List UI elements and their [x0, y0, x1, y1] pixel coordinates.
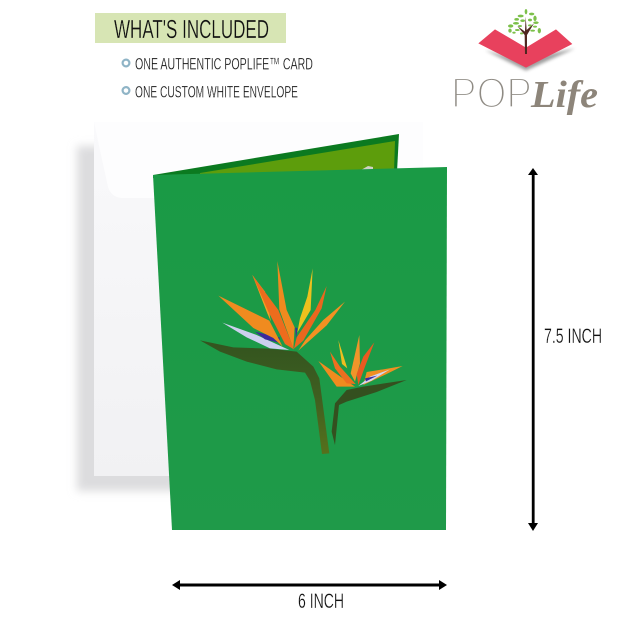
large flower pale petal — [222, 323, 289, 350]
heading: what's included: WHAT'S INCLUDED — [114, 14, 269, 44]
list item: card — [123, 54, 313, 74]
arrow: width dimension — [172, 580, 447, 590]
card inside lime panel — [200, 141, 395, 175]
card front cover — [153, 167, 447, 530]
flower: small bird of paradise — [318, 335, 407, 445]
small flower petals — [318, 335, 403, 387]
logo wordmark: POP: POP — [451, 70, 532, 118]
card inside paper detail — [361, 166, 373, 170]
envelope body — [94, 122, 423, 476]
list item: card: ONE AUTHENTIC POPLIFE™ CARD — [135, 54, 313, 74]
arrow: height dimension — [528, 168, 538, 531]
list: included items — [123, 54, 313, 102]
flower: large bird of paradise — [200, 261, 345, 454]
logo wordmark: Life: Life — [530, 74, 598, 116]
list item: envelope — [123, 82, 298, 102]
large flower leaf and stem — [200, 340, 329, 454]
envelope flap — [94, 122, 423, 198]
envelope shadow — [77, 146, 177, 491]
logo mark: red open book with tree — [478, 9, 575, 71]
card back panel — [153, 134, 399, 178]
small flower leaf and stem — [332, 380, 407, 445]
logo: poplife — [451, 9, 598, 118]
heading: what's included — [95, 13, 286, 44]
list item: envelope: ONE CUSTOM WHITE ENVELOPE — [135, 82, 298, 102]
large flower purple tongue — [255, 332, 280, 343]
envelope with shadow — [77, 122, 423, 491]
greeting card — [153, 134, 447, 530]
label: width: 6 INCH — [298, 590, 344, 613]
large flower petals — [218, 261, 345, 351]
